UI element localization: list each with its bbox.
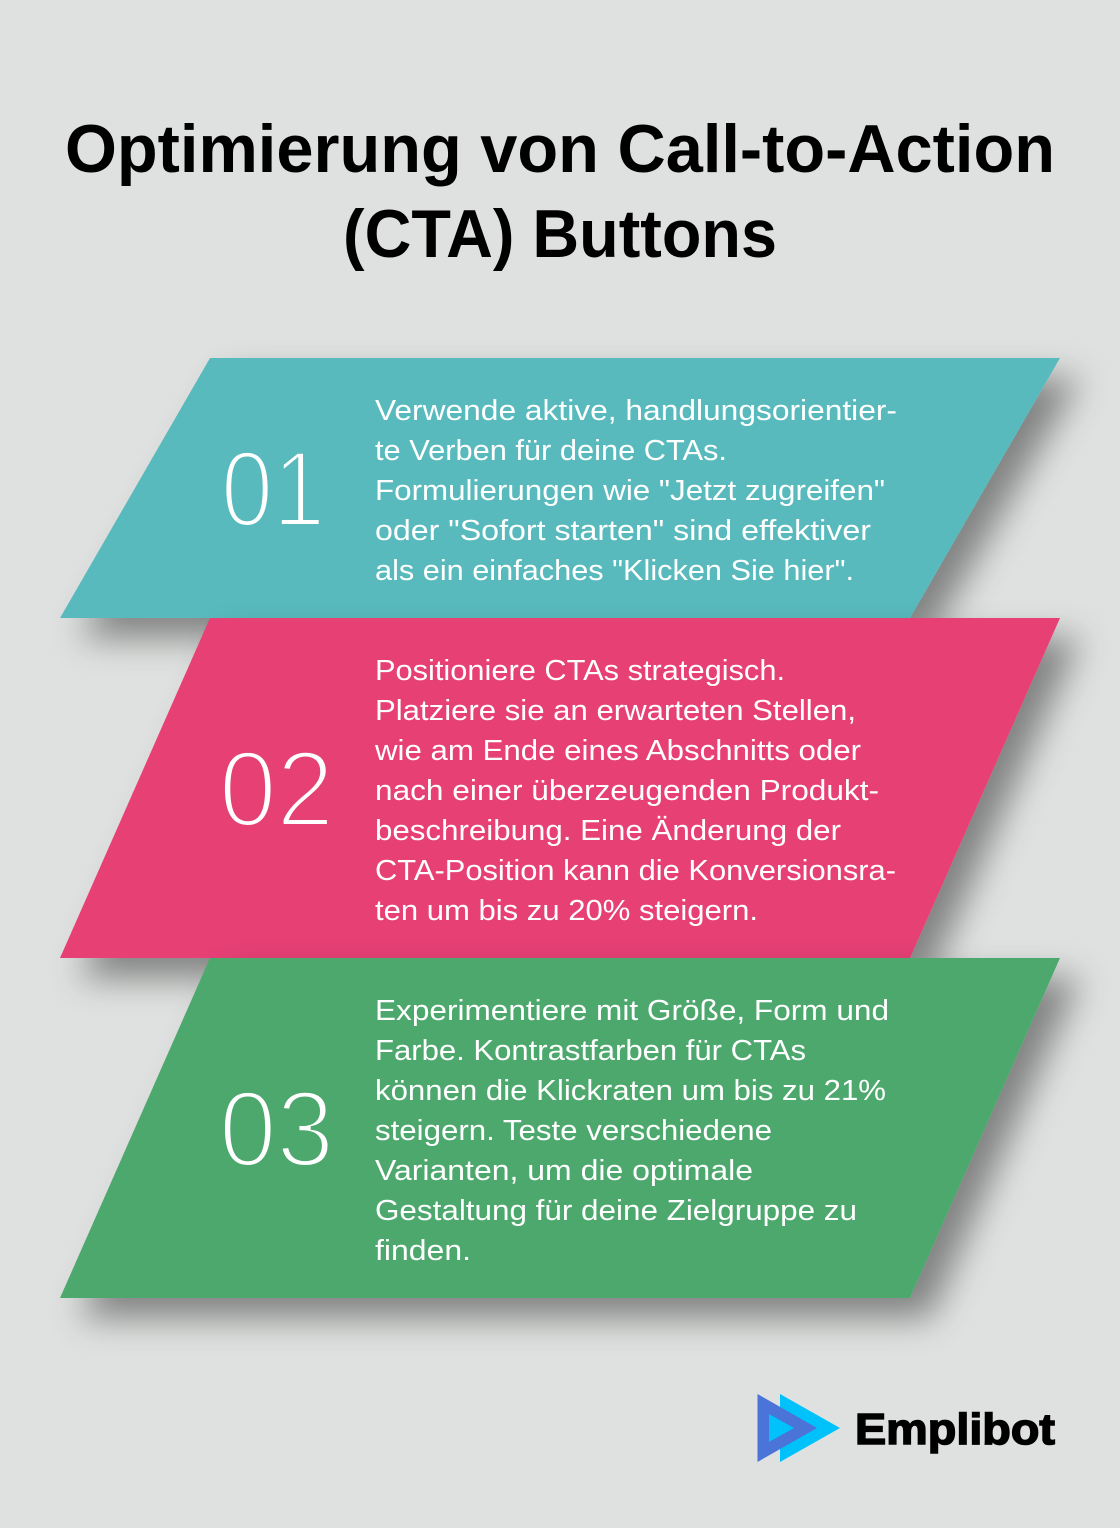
text block: step 03: Varianten, um die optimale — [375, 1155, 753, 1187]
text block: step 01: oder "Sofort starten" sind effektiver — [375, 515, 871, 547]
logo: Emplibot — [758, 1394, 1055, 1462]
title: (CTA) Buttons — [343, 196, 777, 272]
text block: step 03: steigern. Teste verschiedene — [375, 1115, 772, 1147]
text block: step 01: Verwende aktive, handlungsorientier- — [375, 395, 897, 427]
text block: step 03: Gestaltung für deine Zielgruppe zu — [375, 1195, 857, 1227]
text block: step 01: Formulierungen wie "Jetzt zugreifen" — [375, 475, 885, 507]
icon: play triangles — [758, 1394, 840, 1462]
panel: step 02 — [60, 618, 1060, 958]
teal parallelogram — [60, 358, 1060, 618]
title: Optimierung von Call-to-Action — [65, 111, 1055, 187]
number 01: 01 — [221, 428, 325, 549]
text block: step 03: Farbe. Kontrastfarben für CTAs — [375, 1035, 806, 1067]
text block: step 02: wie am Ende eines Abschnitts oder — [374, 735, 861, 767]
title — [65, 111, 1055, 272]
panel: step 01 — [60, 358, 1060, 618]
text block: step 02: nach einer überzeugenden Produkt- — [375, 775, 879, 807]
text block: step 02: beschreibung. Eine Änderung der — [375, 815, 841, 847]
text block: step 02: CTA-Position kann die Konversionsra- — [375, 855, 896, 887]
pink parallelogram — [60, 618, 1060, 958]
panel: step 03 — [60, 958, 1060, 1298]
text block: step 03: können die Klickraten um bis zu 21% — [375, 1075, 886, 1107]
text block: step 01: als ein einfaches "Klicken Sie hier". — [375, 555, 854, 587]
text block: step 02: Positioniere CTAs strategisch. — [375, 655, 785, 687]
number 03: 03 — [219, 1068, 334, 1189]
green parallelogram — [60, 958, 1060, 1298]
text block: step 02: ten um bis zu 20% steigern. — [375, 895, 758, 927]
wordmark: Emplibot — [855, 1405, 1055, 1454]
text block: step 03 — [375, 995, 889, 1267]
text block: step 01: te Verben für deine CTAs. — [375, 435, 727, 467]
number 02: 02 — [219, 728, 334, 849]
text block: step 01 — [375, 395, 897, 587]
text block: step 03: Experimentiere mit Größe, Form und — [375, 995, 889, 1027]
text block: step 02 — [374, 655, 896, 927]
text block: step 02: Platziere sie an erwarteten Stellen, — [375, 695, 856, 727]
text block: step 03: finden. — [375, 1235, 471, 1267]
